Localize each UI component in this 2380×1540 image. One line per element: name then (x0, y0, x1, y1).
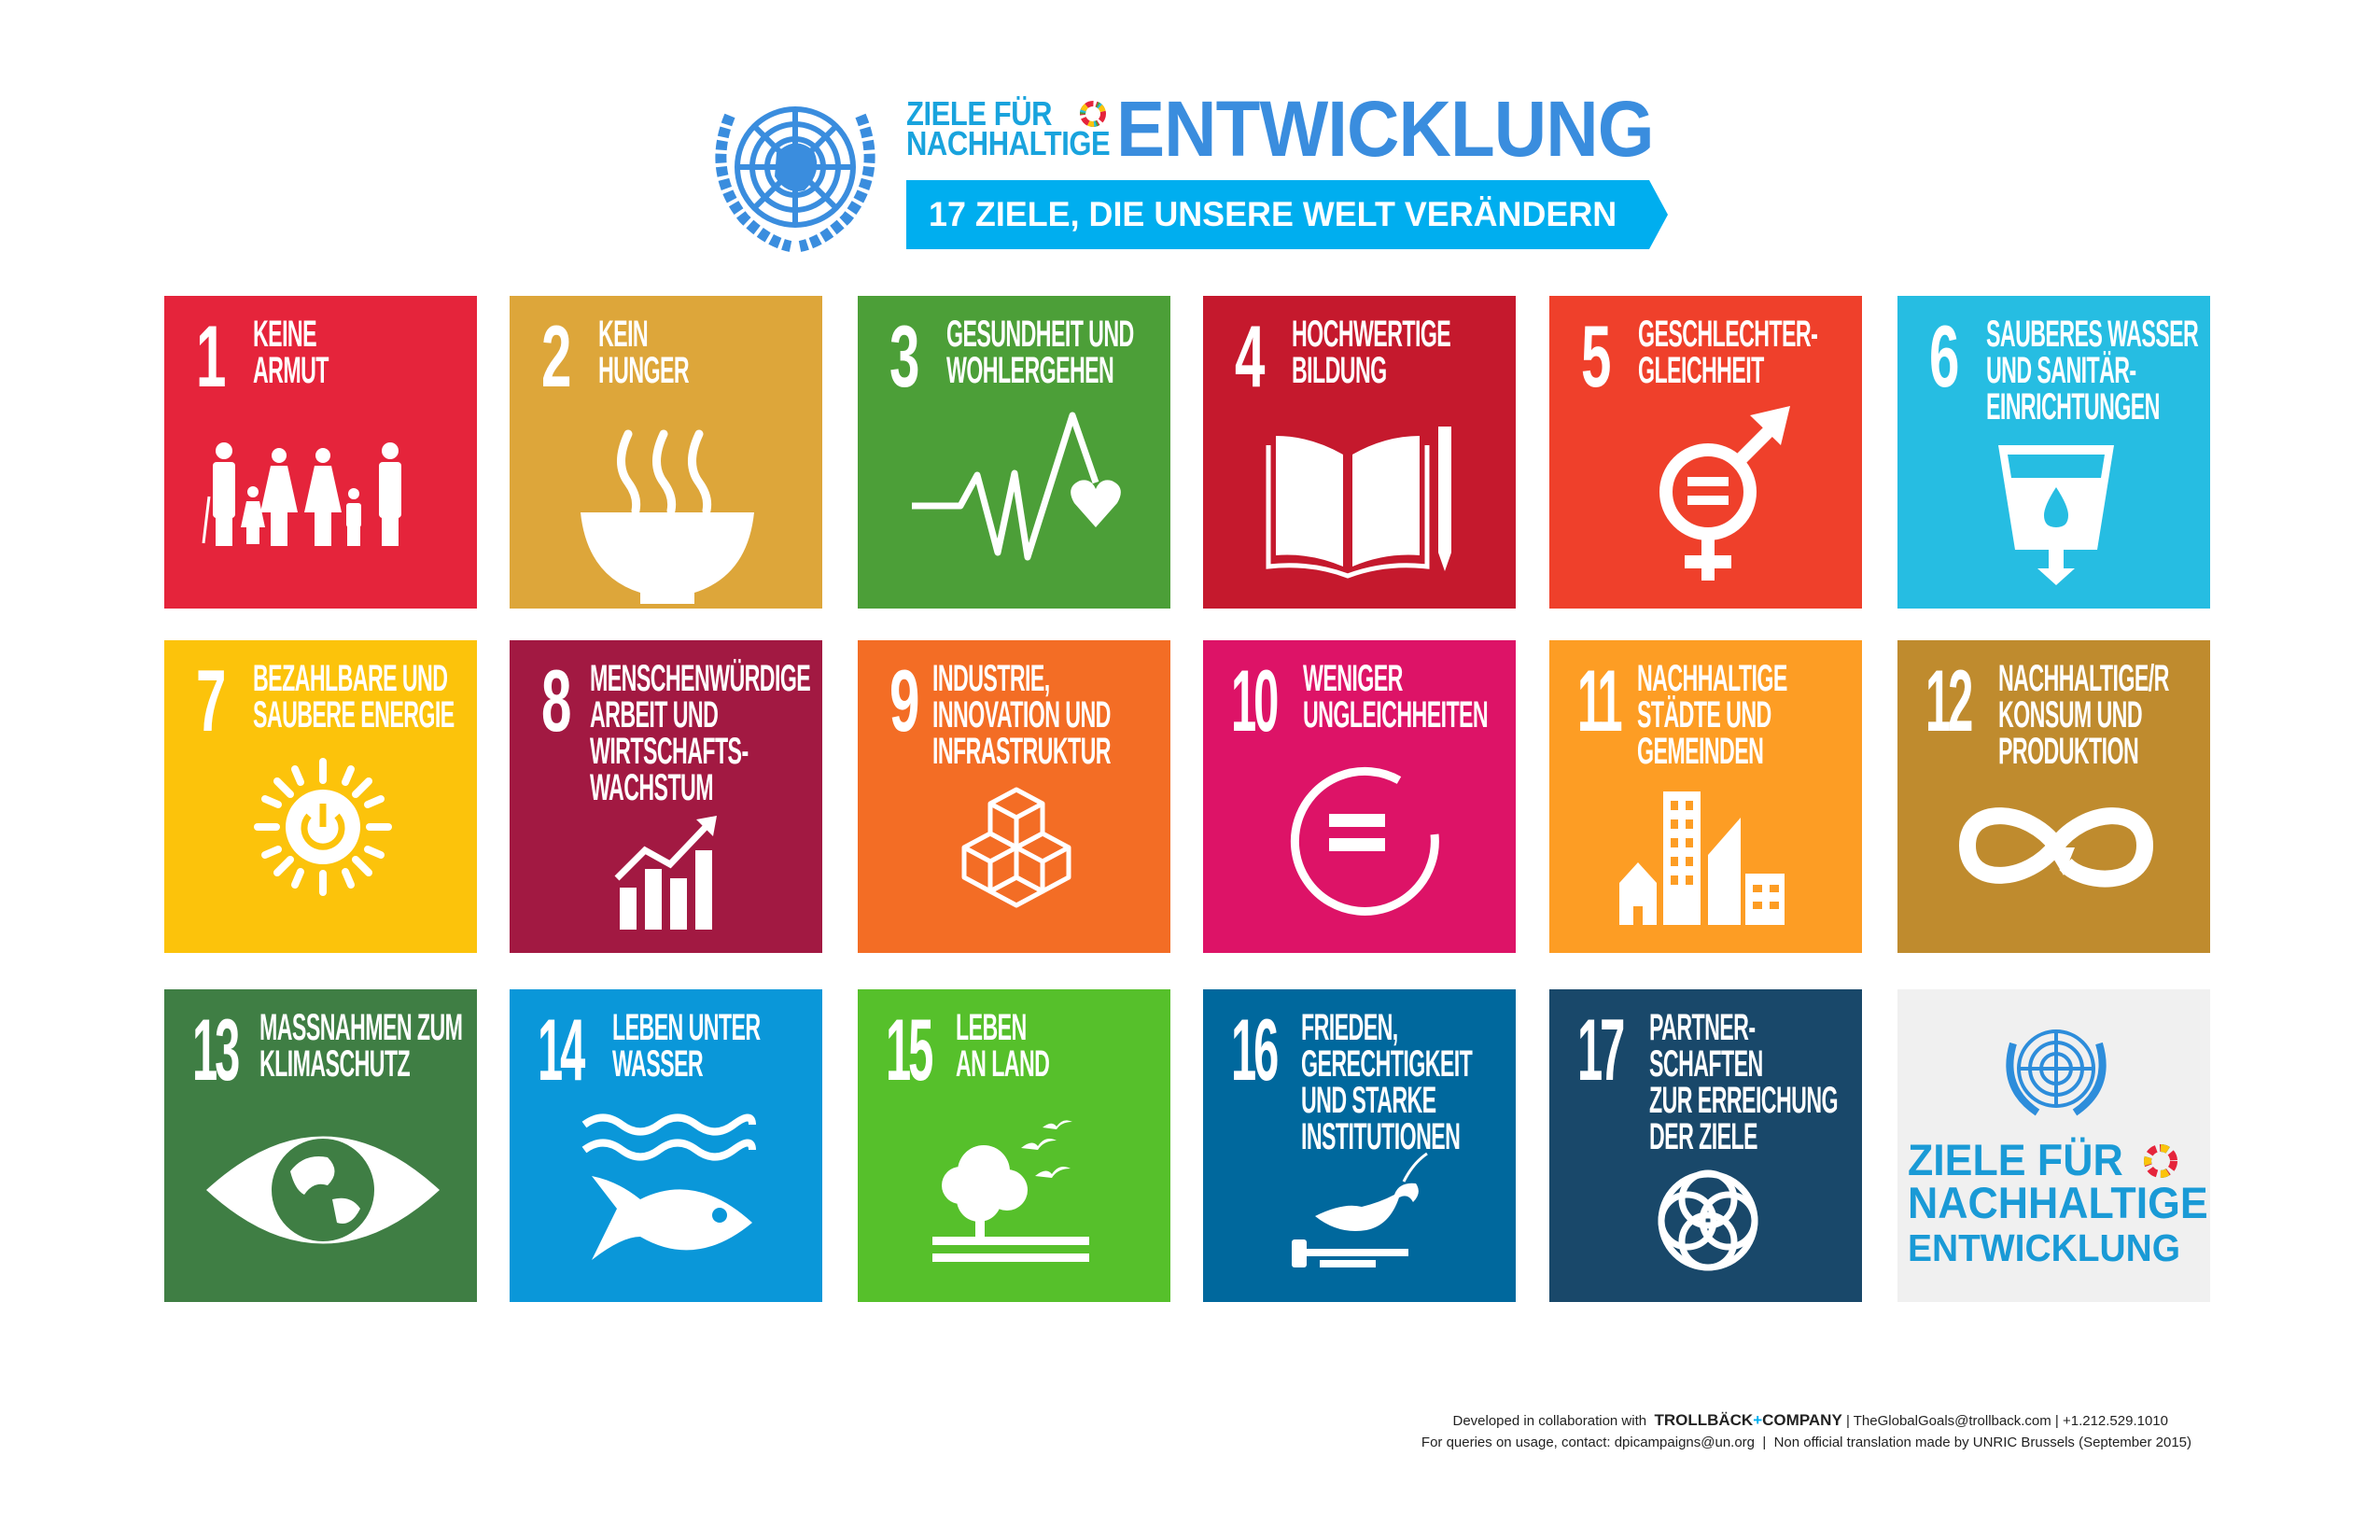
tile 5: 5 (1581, 307, 1610, 405)
tile 2: 2 (541, 307, 570, 405)
tile 6 (1897, 296, 2210, 609)
tile 6: UND SANITÄR- (1986, 350, 2136, 391)
tile 8: MENSCHENWÜRDIGE (590, 658, 810, 699)
header: banner (906, 180, 1668, 249)
tile 15 (858, 989, 1170, 1302)
tile 17: DER ZIELE (1649, 1116, 1757, 1157)
tile 11: GEMEINDEN (1637, 731, 1763, 772)
icon: eye globe (206, 1137, 440, 1243)
tile 9: INDUSTRIE, (932, 658, 1050, 699)
icon: book and pencil (1266, 427, 1451, 579)
icon: dove and gavel (1292, 1152, 1428, 1267)
tile 6: 6 (1929, 307, 1958, 405)
tile 1 (164, 296, 477, 609)
tile 15: LEBEN (956, 1007, 1027, 1048)
header: SDG wheel (1080, 101, 1106, 127)
tile 17: ZUR ERREICHUNG (1649, 1080, 1838, 1121)
tile 13 (164, 989, 477, 1302)
tile 9: INNOVATION UND (932, 694, 1111, 735)
footer credits: Developed in collaboration with TROLLBÄCK+COMPANY | TheGlobalGoals@trollback.com | +1.212.529.1010 (1452, 1411, 2168, 1429)
tile 6: EINRICHTUNGEN (1986, 386, 2160, 427)
tile 17 (1549, 989, 1862, 1302)
tile 8 (510, 640, 822, 953)
tile 10: WENIGER (1303, 658, 1403, 699)
tile 13: KLIMASCHUTZ (259, 1043, 410, 1085)
tile 4: HOCHWERTIGE (1292, 314, 1450, 355)
icon: sun power (254, 758, 392, 896)
tile 17: 17 (1577, 1001, 1622, 1099)
tile 12: PRODUKTION (1998, 731, 2138, 772)
tile 15: AN LAND (956, 1043, 1049, 1085)
tile 12: 12 (1925, 651, 1970, 749)
tile 3: GESUNDHEIT UND (946, 314, 1134, 355)
header: ENTWICKLUNG: ENTWICKLUNG (1116, 85, 1654, 173)
tile 16: GERECHTIGKEIT (1301, 1043, 1472, 1085)
tile 11 (1549, 640, 1862, 953)
tile 8: WACHSTUM (590, 767, 713, 808)
tile 10: 10 (1231, 651, 1276, 749)
tile 10 (1203, 640, 1516, 953)
header: title text ZIELE FÜR NACHHALTIGE: ZIELE FÜR (906, 94, 1052, 133)
tile 7: BEZAHLBARE UND (253, 658, 447, 699)
tile 16 (1203, 989, 1516, 1302)
tile 4: BILDUNG (1292, 350, 1387, 391)
tile 7: SAUBERE ENERGIE (253, 694, 455, 735)
tile 9: INFRASTRUKTUR (932, 731, 1111, 772)
tile 17: PARTNER- (1649, 1007, 1756, 1048)
icon: water cup (1998, 445, 2114, 585)
logo text: ENTWICKLUNG (1908, 1226, 2180, 1269)
icon: city (1619, 791, 1785, 925)
logo text (1908, 1135, 2208, 1269)
tile 5 (1549, 296, 1862, 609)
logo text: ZIELE FÜR (1908, 1135, 2123, 1184)
tile 1: ARMUT (253, 350, 329, 391)
header: title text ZIELE FÜR NACHHALTIGE: NACHHALTIGE (906, 124, 1110, 162)
tile 7: 7 (196, 651, 225, 749)
tile 5: GLEICHHEIT (1638, 350, 1764, 391)
tile 12 (1897, 640, 2210, 953)
tile 16: INSTITUTIONEN (1301, 1116, 1460, 1157)
tile 10: UNGLEICHHEITEN (1303, 694, 1488, 735)
tile 11: STÄDTE UND (1637, 694, 1771, 735)
tile 1: 1 (196, 307, 225, 405)
tile 13: MASSNAHMEN ZUM (259, 1007, 462, 1048)
tile 16: UND STARKE (1301, 1080, 1436, 1121)
tile 6: SAUBERES WASSER (1986, 314, 2198, 355)
tile 8: ARBEIT UND (590, 694, 718, 735)
tile 16: FRIEDEN, (1301, 1007, 1398, 1048)
icon: heartbeat (912, 413, 1121, 560)
tile 12: KONSUM UND (1998, 694, 2142, 735)
icon: cubes (961, 788, 1071, 907)
icon: bowl (581, 429, 754, 604)
tile 16: 16 (1231, 1001, 1276, 1099)
tile 4: 4 (1235, 307, 1264, 405)
icon: growth chart (614, 816, 717, 930)
icon: gender equality (1659, 406, 1790, 581)
tile 1: KEINE (253, 314, 316, 355)
tile 8: WIRTSCHAFTS- (590, 731, 749, 772)
tile 11: 11 (1577, 651, 1619, 749)
logo text: NACHHALTIGE (1908, 1178, 2208, 1227)
tile 15: 15 (886, 1001, 931, 1099)
icon: UN emblem small (2006, 1029, 2107, 1116)
footer credits: For queries on usage, contact: dpicampaigns@un.org | Non official translation made by UNRIC Brussels (September 2015) (1421, 1435, 2191, 1450)
icon: waves and fish (582, 1113, 756, 1260)
icon: flower rings (1658, 1170, 1758, 1271)
tile 12: NACHHALTIGE/R (1998, 658, 2169, 699)
tile 17: SCHAFTEN (1649, 1043, 1763, 1085)
tile 14: 14 (538, 1001, 582, 1099)
icon: family (202, 442, 401, 546)
header: banner: 17 ZIELE, DIE UNSERE WELT VERÄNDERN (929, 195, 1617, 233)
tile 9 (858, 640, 1170, 953)
tile 7 (164, 640, 477, 953)
icon: SDG wheel (2144, 1144, 2177, 1178)
tile 3: 3 (889, 307, 918, 405)
tile 3: WOHLERGEHEN (946, 350, 1113, 391)
tile 14: WASSER (612, 1043, 703, 1085)
tile 8: 8 (541, 651, 570, 749)
header: UN emblem (715, 106, 875, 252)
tile 2: HUNGER (598, 350, 689, 391)
footer credits (1421, 1411, 2191, 1450)
header: title text ZIELE FÜR NACHHALTIGE (906, 94, 1110, 162)
tile 4 (1203, 296, 1516, 609)
tile 3 (858, 296, 1170, 609)
icon: equality circle (1290, 767, 1439, 916)
tile 5: GESCHLECHTER- (1638, 314, 1817, 355)
tile 18: SDG logo (1897, 989, 2210, 1302)
tile 9: 9 (889, 651, 918, 749)
tile 14: LEBEN UNTER (612, 1007, 761, 1048)
icon: infinity (1959, 807, 2153, 888)
tile 2: KEIN (598, 314, 648, 355)
tile 2 (510, 296, 822, 609)
tile 11: NACHHALTIGE (1637, 658, 1787, 699)
tile 14 (510, 989, 822, 1302)
tile 13: 13 (192, 1001, 237, 1099)
icon: tree and birds (932, 1120, 1089, 1262)
